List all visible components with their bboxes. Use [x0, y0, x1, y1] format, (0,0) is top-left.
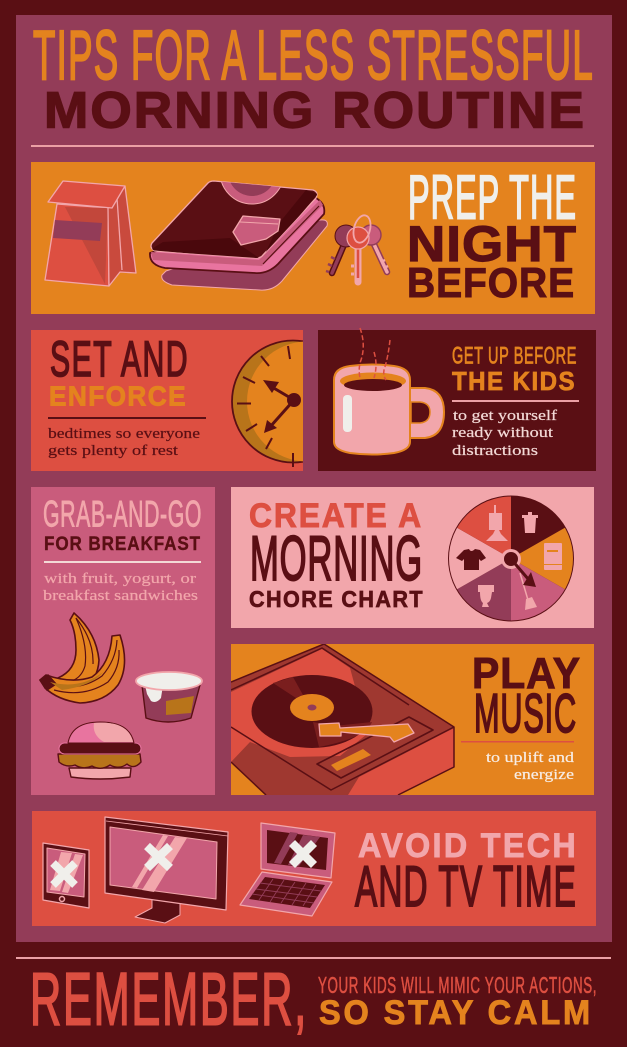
title line 2: MORNING ROUTINE	[44, 82, 586, 138]
text: with fruit	[43, 571, 198, 604]
panel: get up before the kids	[318, 328, 596, 471]
heading: night: NIGHT	[407, 216, 577, 272]
heading: play: PLAY	[472, 650, 581, 698]
text: bedtimes	[48, 426, 200, 459]
icon: folded shirts	[149, 180, 328, 291]
icon: toilet	[478, 585, 494, 607]
heading: chore chart: CHORE CHART	[249, 586, 424, 612]
heading: morning: MORNING	[250, 524, 423, 594]
footer: remember: REMEMBER,	[30, 958, 308, 1040]
text: to get yourself: ready without	[452, 425, 554, 441]
panel: prep the night before	[31, 162, 595, 314]
panel: chore chart	[231, 487, 594, 630]
footer: so stay calm: SO STAY CALM	[319, 994, 593, 1032]
heading: for breakfast: FOR BREAKFAST	[44, 534, 201, 555]
icon: laundry machine	[544, 543, 562, 570]
icon: bananas	[40, 613, 125, 703]
icon: paper bag	[45, 181, 136, 286]
icon: record player	[231, 644, 454, 795]
text: to get yourself: to get yourself	[453, 408, 557, 424]
panel: play music	[231, 644, 594, 795]
icon: shirt	[456, 549, 486, 570]
icon: mug	[334, 328, 444, 454]
text: to get yourself: distractions	[452, 443, 538, 459]
heading: enforce: ENFORCE	[49, 380, 187, 412]
text: bedtimes: gets plenty of rest	[48, 443, 179, 459]
icon: monitor	[105, 817, 228, 923]
heading: avoid tech: AVOID TECH	[358, 827, 578, 865]
text: with fruit: breakfast sandwiches	[43, 588, 198, 604]
heading: the kids: THE KIDS	[452, 368, 576, 396]
icon: broom	[520, 573, 537, 610]
icon: steam	[359, 328, 390, 380]
icon: tablet	[43, 843, 89, 908]
footer callout	[30, 958, 597, 1040]
text: to uplift: energize	[514, 767, 574, 783]
panel: grab and go	[31, 487, 215, 795]
chart: chore wheel	[448, 496, 574, 622]
icon: vacuum	[486, 505, 508, 541]
heading: grab-and-go: GRAB-AND-GO	[43, 494, 202, 534]
text: to uplift: to uplift and	[486, 750, 575, 766]
panel: set and enforce	[31, 330, 303, 471]
icon: yogurt cup	[136, 672, 202, 722]
icon: keys	[326, 213, 388, 282]
icon: burger	[58, 722, 141, 779]
icon: trash can	[522, 512, 538, 533]
title	[33, 16, 594, 138]
heading: before: BEFORE	[407, 259, 575, 306]
text: with fruit: with fruit, yogurt, or	[44, 571, 196, 587]
text: bedtimes: bedtimes so everyone	[48, 426, 200, 442]
heading: create a: CREATE A	[249, 497, 423, 535]
panel: avoid tech	[32, 811, 596, 926]
icon: laptop	[240, 823, 335, 916]
text: to get yourself	[452, 408, 557, 459]
icon: clock	[231, 340, 303, 467]
text: to uplift	[486, 750, 575, 783]
heading: set and: SET AND	[50, 331, 189, 387]
